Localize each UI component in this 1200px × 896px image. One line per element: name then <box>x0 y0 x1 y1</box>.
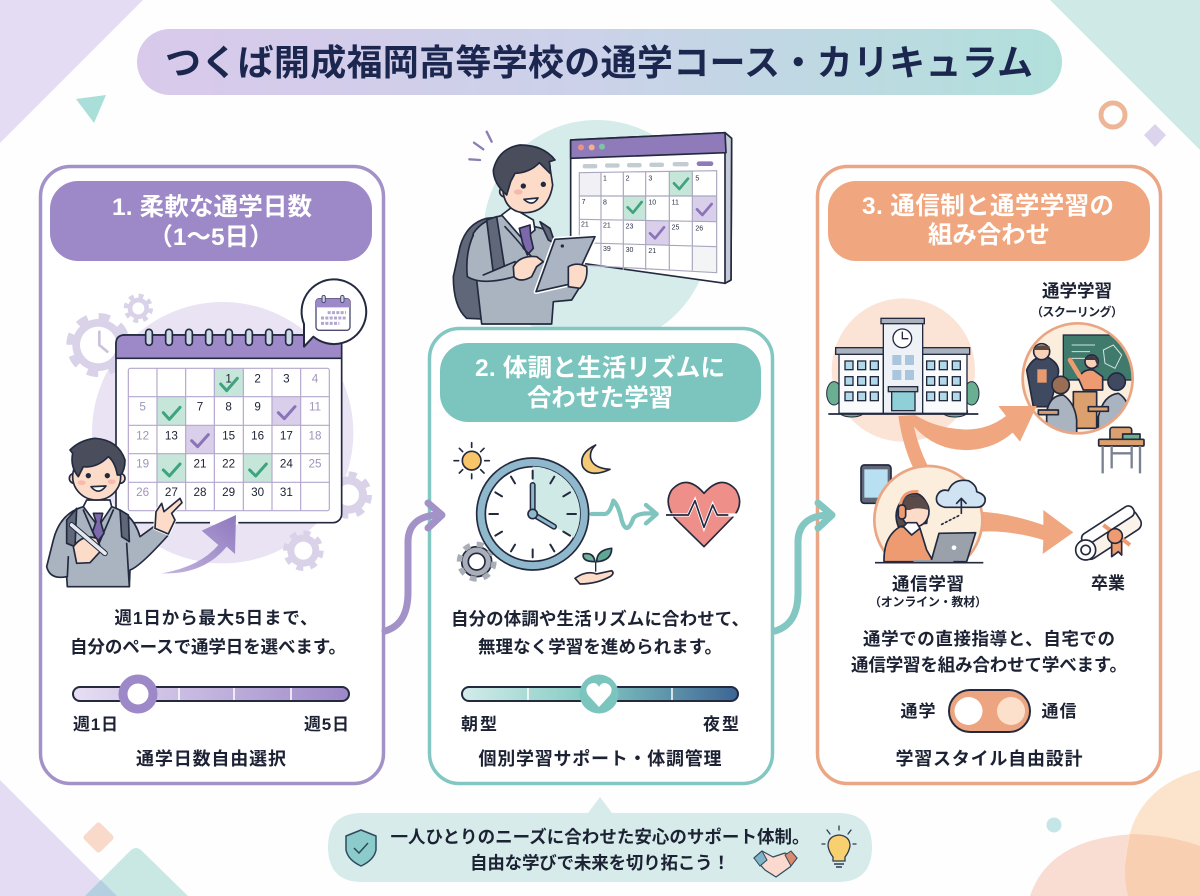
calendar: 26 <box>136 486 149 499</box>
callout text: 一人ひとりのニーズに合わせた安心のサポート体制。 <box>390 827 810 847</box>
growth arrow <box>162 515 236 573</box>
icon: light bulb <box>822 826 856 867</box>
speech bubble calendar icon <box>302 279 366 347</box>
calendar window: 23 <box>626 223 634 230</box>
flow arrows <box>898 406 1073 554</box>
callout text <box>390 827 810 873</box>
calendar window: 3 <box>648 176 652 183</box>
callout text: 自由な学びで未来を切り拓こう！ <box>470 853 730 873</box>
sun <box>454 443 489 479</box>
gears <box>70 296 369 568</box>
label: attendance learning: （スクーリング） <box>1031 304 1123 319</box>
illustration: student with tablet and calendar <box>453 120 732 347</box>
bottom callout <box>328 797 872 882</box>
panel 1 header: （1〜5日） <box>148 223 274 251</box>
calendar: 25 <box>309 458 321 471</box>
panel 3 header <box>828 181 1150 261</box>
calendar: 2 <box>254 372 261 385</box>
calendar window: 21 <box>603 223 611 230</box>
student pointing at calendar <box>47 438 182 587</box>
panel 2 caption: 個別学習サポート・体調管理 <box>478 748 722 769</box>
panel 1 description: 週1日から最大5日まで、 <box>114 608 318 628</box>
school <box>827 298 979 442</box>
panel 3 caption: 学習スタイル自由設計 <box>896 748 1082 769</box>
panel 2 slider <box>461 674 739 734</box>
panel 3 description: 通信学習を組み合わせて学べます。 <box>851 655 1127 675</box>
calendar: 30 <box>251 486 265 499</box>
heart <box>666 482 740 547</box>
calendar: 1 <box>225 372 232 385</box>
calendar window: 7 <box>582 199 586 206</box>
panel 2 slider: 夜型 <box>703 715 739 734</box>
panel 2 description: 自分の体調や生活リズムに合わせて、 <box>451 609 749 629</box>
moon <box>582 445 610 473</box>
student <box>453 132 595 324</box>
calendar: 3 <box>283 372 290 385</box>
calendar: 5 <box>139 401 146 414</box>
panel 3 toggle: 通信 <box>1042 702 1076 721</box>
calendar: 27 <box>165 486 178 499</box>
wave arrow <box>592 501 657 528</box>
calendar: 31 <box>280 486 293 499</box>
calendar: 19 <box>136 458 149 471</box>
calendar window: 2 <box>626 176 630 183</box>
panel 3 header: 3. 通信制と通学学習の <box>862 192 1114 220</box>
panel 2 clock and heart illustration <box>454 443 740 584</box>
clock <box>477 458 589 570</box>
calendar window: 8 <box>603 200 607 207</box>
calendar window: 21 <box>581 222 589 229</box>
panel 2 header <box>440 343 761 422</box>
panel 2 description <box>451 609 749 657</box>
label: correspondence learning: （オンライン・教材） <box>869 594 987 609</box>
calendar: 28 <box>194 486 206 499</box>
calendar window: 26 <box>695 226 703 233</box>
calendar window: 11 <box>672 200 679 207</box>
label: correspondence learning <box>869 574 987 609</box>
label: attendance learning: 通学学習 <box>1042 281 1112 301</box>
panel 3 header: 組み合わせ <box>928 221 1050 249</box>
calendar <box>116 329 342 525</box>
panel 2 description: 無理なく学習を進められます。 <box>478 637 722 657</box>
calendar window: 21 <box>648 248 656 255</box>
calendar window: 1 <box>603 176 607 183</box>
panel 1 slider <box>73 679 349 734</box>
panel 1 description: 自分のペースで通学日を選べます。 <box>70 637 346 657</box>
calendar window: 5 <box>695 176 699 183</box>
calendar: 29 <box>222 486 235 499</box>
title <box>137 29 1062 95</box>
label: graduation: 卒業 <box>1091 574 1125 593</box>
arrow: panel 1 to panel 2 <box>385 503 442 631</box>
label: correspondence learning: 通信学習 <box>892 574 964 594</box>
panel 1 header <box>50 181 372 261</box>
calendar window: 30 <box>626 247 634 254</box>
panel 3 learning flow illustration <box>827 298 1144 574</box>
calendar: 17 <box>280 429 293 442</box>
panel 3 toggle <box>900 690 1076 732</box>
panel 1: flexible attendance days <box>40 166 384 784</box>
plant in hand <box>575 548 613 584</box>
calendar: 11 <box>309 401 321 414</box>
icon: shield <box>346 830 376 866</box>
icon: handshake <box>754 851 797 877</box>
calendar: 24 <box>280 458 293 471</box>
panel 1 caption: 通学日数自由選択 <box>136 748 286 769</box>
calendar window: 39 <box>603 246 611 253</box>
calendar window: 25 <box>672 225 680 232</box>
panel 2 header: 2. 体調と生活リズムに <box>475 353 725 382</box>
calendar: 13 <box>165 429 178 442</box>
calendar: 18 <box>309 429 321 442</box>
title: つくば開成福岡高等学校の通学コース・カリキュラム <box>165 42 1033 83</box>
calendar window <box>571 133 732 283</box>
calendar: 9 <box>254 401 261 414</box>
tablet icon <box>861 465 891 503</box>
diploma <box>1074 504 1144 562</box>
panel 1 calendar illustration <box>47 279 369 587</box>
panel 1 slider: 週5日 <box>304 715 349 734</box>
panel 3 description: 通学での直接指導と、自宅での <box>863 629 1115 649</box>
panel 2: matching health and lifestyle <box>430 328 772 784</box>
panel 1 slider: 週1日 <box>73 715 118 734</box>
panel 3: combining correspondence and attendance <box>818 166 1160 784</box>
panel 1 description <box>70 608 346 657</box>
panel 3 toggle: 通学 <box>900 701 936 721</box>
school desk <box>1099 427 1144 473</box>
panel 2 header: 合わせた学習 <box>527 384 673 412</box>
calendar: 16 <box>251 429 264 442</box>
calendar: 22 <box>222 458 235 471</box>
calendar window: 10 <box>648 200 656 207</box>
classroom circle <box>1023 323 1135 437</box>
panel 3 description <box>851 629 1127 675</box>
gear <box>459 544 494 579</box>
calendar: 12 <box>136 429 149 442</box>
panel 2 slider: 朝型 <box>461 715 497 734</box>
calendar: 7 <box>197 401 203 414</box>
online learner <box>874 466 985 574</box>
calendar: 8 <box>225 401 232 414</box>
calendar: 21 <box>194 458 206 471</box>
arrow: panel 2 to panel 3 <box>775 503 832 631</box>
calendar: 4 <box>312 372 319 385</box>
panel 1 header: 1. 柔軟な通学日数 <box>112 193 312 221</box>
calendar: 15 <box>222 429 235 442</box>
label: attendance learning <box>1031 281 1123 319</box>
